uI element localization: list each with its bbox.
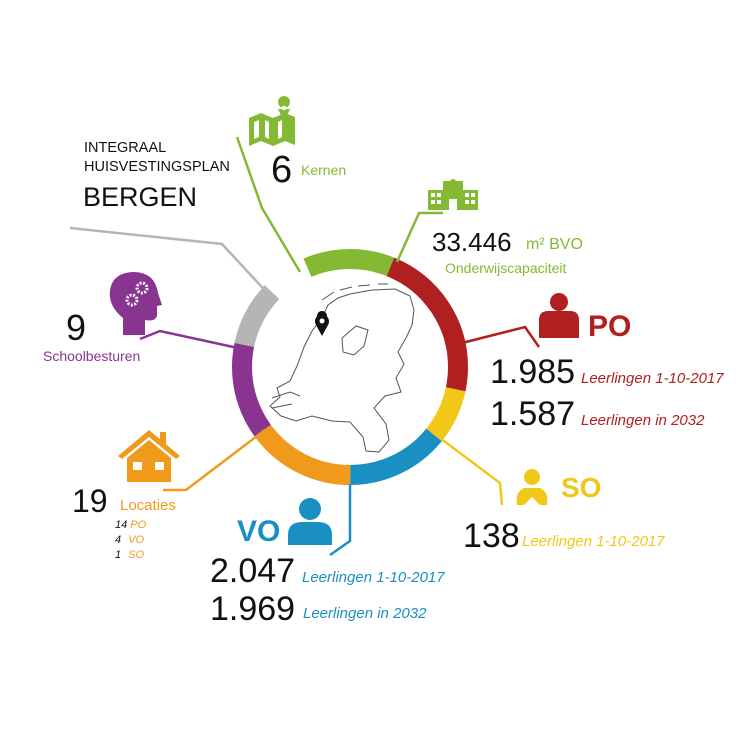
icon: map pin (315, 311, 329, 336)
stat: schoolbesturen: Schoolbesturen (43, 348, 140, 364)
ring chart (242, 259, 458, 475)
VO block (210, 515, 445, 628)
VO block: VO (237, 515, 280, 548)
icon: head with gears (110, 272, 162, 335)
PO block: Leerlingen in 2032 (581, 412, 705, 429)
icon: PO person (539, 293, 579, 338)
stat: BVO: 33.446 (432, 227, 512, 257)
stat: BVO: m² BVO (526, 236, 583, 253)
title: BERGEN (83, 182, 197, 212)
stat: kernen (271, 149, 346, 191)
stat: locaties: 4 VO (115, 534, 145, 546)
icon: school (428, 179, 478, 210)
stat: schoolbesturen: 9 (66, 307, 86, 348)
stat: kernen: Kernen (301, 162, 346, 178)
SO block: Leerlingen 1-10-2017 (522, 533, 665, 550)
map: netherlands (270, 284, 414, 452)
stat: kernen: 6 (271, 149, 292, 191)
VO block: Leerlingen 1-10-2017 (302, 569, 445, 586)
PO block: 1.587 (490, 395, 575, 433)
title: HUISVESTINGSPLAN (84, 159, 230, 175)
title (83, 140, 230, 212)
SO block: SO (561, 472, 601, 503)
title: INTEGRAAL (84, 140, 166, 156)
PO block: Leerlingen 1-10-2017 (581, 370, 724, 387)
stat: locaties: Locaties (120, 497, 176, 514)
SO block: 138 (463, 517, 520, 555)
SO block (463, 472, 665, 555)
icon: VO person (288, 498, 332, 545)
stat: locaties: 14 PO (115, 519, 147, 531)
PO block (490, 310, 724, 433)
icon: map (kernen) (249, 96, 295, 146)
stat: schoolbesturen (43, 307, 140, 364)
PO block: 1.985 (490, 353, 575, 391)
connector lines (70, 137, 539, 555)
PO block: PO (588, 310, 631, 343)
VO block: 1.969 (210, 590, 295, 628)
icon: house (118, 430, 180, 482)
VO block: 2.047 (210, 552, 295, 590)
stat: locaties: 1 SO (115, 549, 145, 561)
stat: BVO (432, 227, 583, 276)
stat: locaties (72, 483, 176, 561)
VO block: Leerlingen in 2032 (303, 605, 427, 622)
stat: BVO: Onderwijscapaciteit (445, 260, 566, 276)
icon: SO reader (517, 469, 547, 505)
stat: locaties: 19 (72, 483, 108, 519)
